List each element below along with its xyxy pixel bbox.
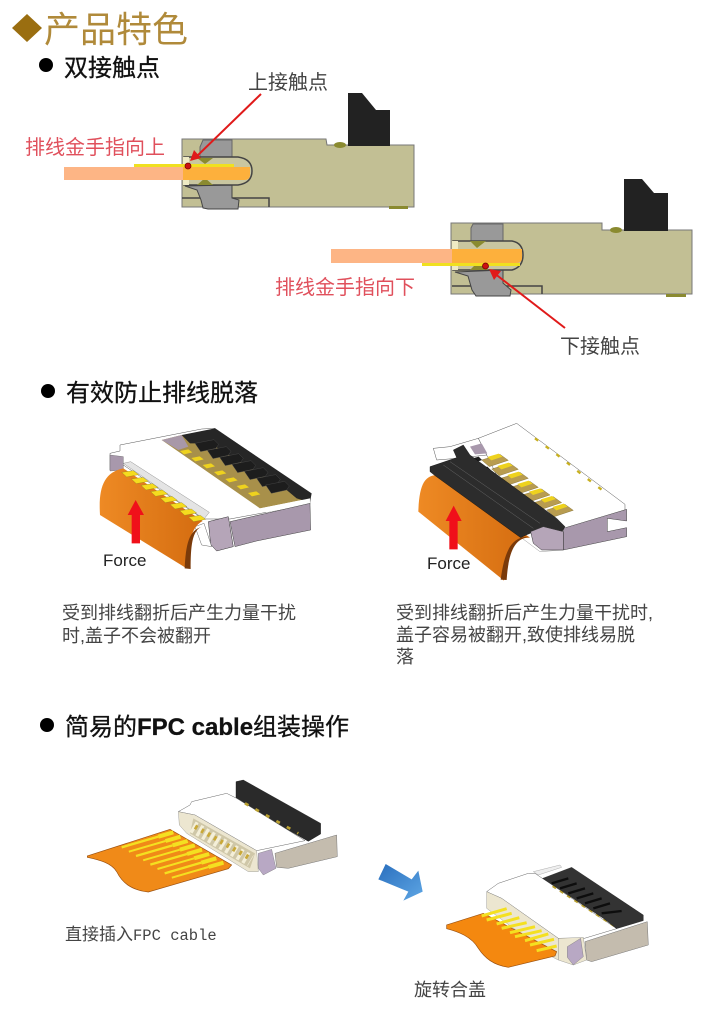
title text: 产品特色 [44,9,188,50]
label: force right: Force [427,554,470,573]
cream bracket base [558,937,587,965]
text block: left caption: 受到排线翻折后产生力量干扰 [62,603,296,623]
red arrow [190,94,261,161]
white strip under cover [520,528,563,552]
lower rail [452,286,542,294]
rear pins [245,803,298,833]
white cover [487,873,617,939]
grey contact bottom [455,270,511,296]
lilac bracket [258,849,276,875]
black stripes [552,878,622,913]
cream front [178,812,258,872]
orange FPC [418,475,530,581]
heading: simple FPC cable assembly: 简易的FPC cable组装操作 [65,714,349,741]
diagram: lower contact connector [331,179,692,328]
orange FPC strip [64,167,250,180]
left end post [110,455,123,471]
red force arrow [128,500,144,543]
diagram: upper contact connector [64,93,414,209]
lilac bracket [567,938,583,965]
grey contact bottom [185,185,239,209]
illustration: open connector with force [418,423,627,581]
black actuator [182,428,312,502]
arrow and assembled connector [378,864,648,967]
lilac side wall [563,509,627,550]
lilac trench end [162,435,188,450]
yellow gold finger [134,164,234,167]
label: upper contact point: 上接触点 [248,71,328,94]
FPC brown edge [185,527,203,569]
lilac side wall [230,503,311,547]
grey contact top [200,140,232,158]
red arrow [489,269,565,328]
connector slot [453,241,523,270]
left frame [433,438,487,460]
orange FPC [100,468,203,568]
contact dot [185,163,191,169]
grey side wall [275,835,337,868]
yellow pads [122,471,206,522]
FPC brown edge [501,537,530,580]
yellow pin tips [180,449,260,496]
connector body [451,223,692,294]
contact gold bits [195,827,250,858]
gold trench [162,435,310,508]
heading: prevents cable detachment: 有效防止排线脱落 [66,380,258,407]
black latch [624,179,668,231]
yellow gold finger [422,263,520,266]
heading: dual contact points: 双接触点 [64,55,160,82]
orange FPC [87,829,232,892]
connector slot [184,157,252,185]
title [12,9,188,50]
grey contact top [471,224,503,242]
orange FPC [447,913,557,967]
solder bumps [610,227,622,233]
white cover [178,793,305,851]
icon: blue arrow [378,864,423,901]
label: force left: Force [103,551,146,570]
orange FPC strip [331,249,522,263]
connector body [182,139,414,207]
white strip beside actuator [260,498,310,512]
rear pins [553,885,615,925]
front slot [123,462,209,519]
text block: right caption: 受到排线翻折后产生力量干扰时, [396,603,653,623]
lower rail [182,198,269,207]
yellow fingers [122,832,223,878]
side bracket [208,517,233,551]
icon: title diamond [12,14,42,42]
recess [190,818,255,868]
gold pins [482,454,573,517]
contact dot [482,263,488,269]
text block: left caption: 时,盖子不会被翻开 [62,626,211,646]
internal contacts [193,827,251,861]
label: lower contact point: 下接触点 [560,335,640,358]
side bracket [531,527,563,550]
text block: right caption: 盖子容易被翻开,致使排线易脱 [396,625,635,645]
latch tabs [471,457,543,515]
black latch [348,93,390,146]
label: gold fingers face down: 排线金手指向下 [275,276,415,299]
illustration: FPC cable insertion [87,780,337,892]
black actuator [543,867,643,929]
solder bumps [334,142,346,148]
text block: right caption: 落 [396,647,414,667]
rear pin tips [535,438,603,491]
label: rotate and close cover: 旋转合盖 [414,980,486,1000]
grey side wall [585,922,648,962]
yellow fingers [482,909,557,951]
cream front [487,892,558,960]
black teeth [195,440,289,493]
red force arrow [446,506,462,549]
white body [478,423,625,530]
label: gold fingers face up: 排线金手指向上 [25,136,165,159]
black cover [430,445,565,538]
illustration: closed connector with force [100,428,312,569]
rear frame [533,865,562,875]
white cover [110,428,310,519]
black actuator [236,780,321,841]
label: insert FPC cable directly: 直接插入FPC cable [65,925,217,945]
